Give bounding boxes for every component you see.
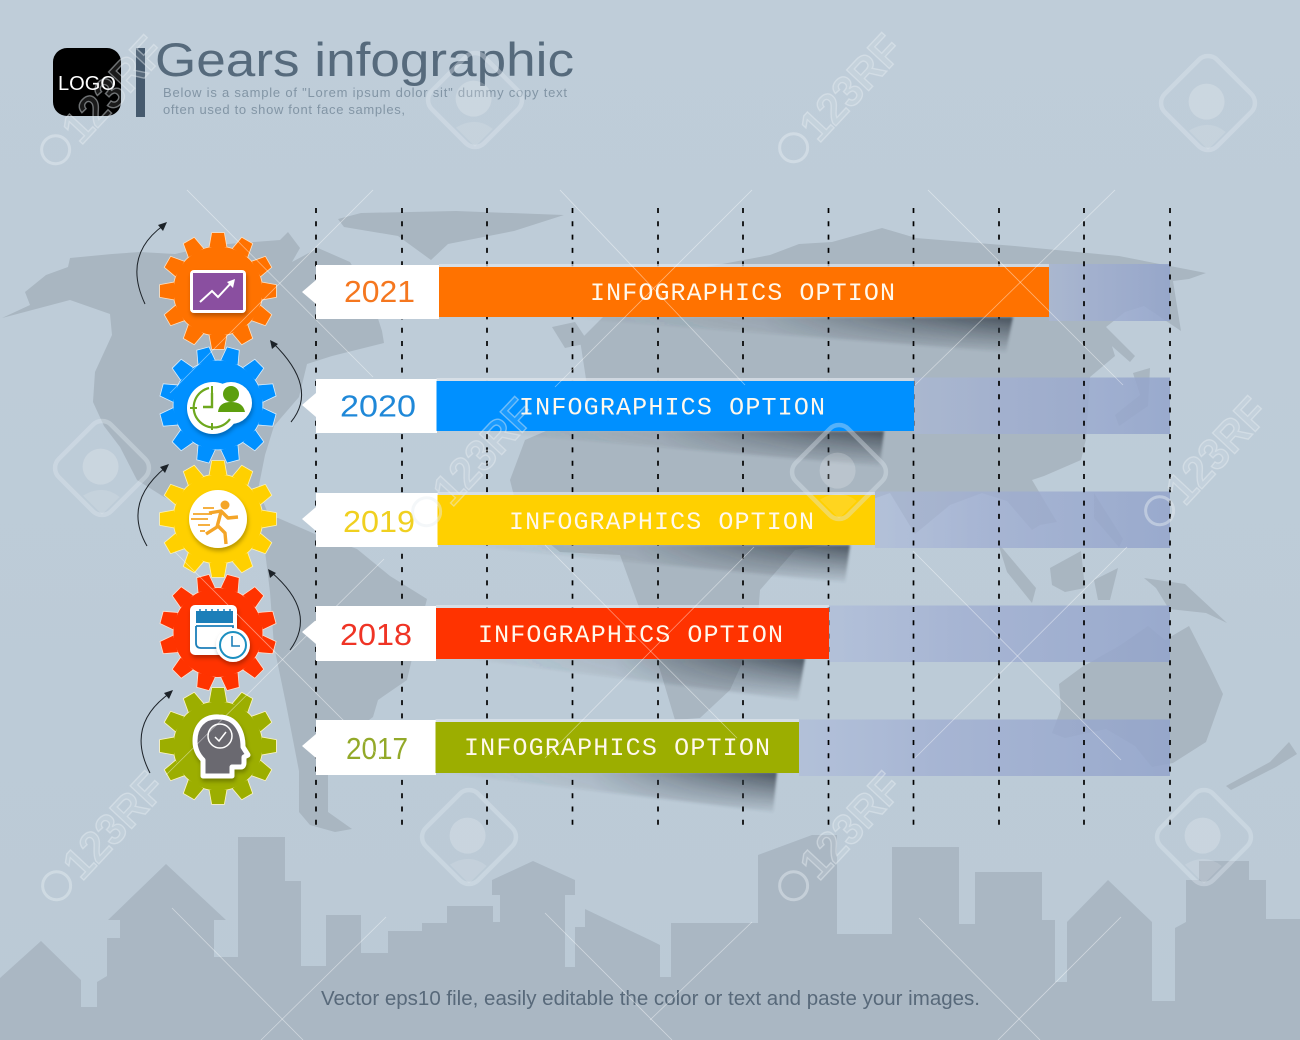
faint progress track bars xyxy=(799,264,1170,776)
watermark crossing lines xyxy=(166,190,1127,1040)
icon: trending chart xyxy=(190,270,246,313)
icon: runner xyxy=(189,490,247,548)
bar 2020 xyxy=(436,378,914,431)
bar 2018: INFOGRAPHICS OPTION xyxy=(478,621,783,650)
row 2019 xyxy=(302,492,875,547)
header logo xyxy=(53,48,121,116)
icon: calendar and clock xyxy=(190,605,250,662)
rotation arrows xyxy=(137,222,302,773)
icon: clock and person xyxy=(187,382,252,434)
world map xyxy=(2,211,1297,832)
year label 2020 xyxy=(302,379,437,433)
year label 2018: 2018 xyxy=(340,617,412,652)
watermark stamps: 123RF xyxy=(790,763,912,889)
watermark stamps: 123RF xyxy=(1156,388,1278,514)
subtitle xyxy=(163,85,567,117)
watermark eggs xyxy=(50,48,1260,889)
year label 2017: 2017 xyxy=(346,731,408,766)
bar 2017: INFOGRAPHICS OPTION xyxy=(464,734,770,763)
footer caption: Vector eps10 file, easily editable the color or text and paste your images. xyxy=(321,988,980,1010)
year label 2019: 2019 xyxy=(343,504,415,539)
year label 2018 xyxy=(302,606,436,661)
icon: head with clock xyxy=(195,717,248,776)
year label 2019 xyxy=(302,493,438,547)
year label 2021 xyxy=(302,265,439,319)
gear: 2020 blue xyxy=(147,334,289,476)
year label 2020: 2020 xyxy=(340,388,416,424)
bar shadows xyxy=(440,317,1013,812)
gear: 2021 orange xyxy=(160,233,276,349)
bar 2019: INFOGRAPHICS OPTION xyxy=(509,508,814,537)
timeline dashed grid xyxy=(316,208,1170,833)
subtitle: Below is a sample of "Lorem ipsum dolor sit" dummy copy text xyxy=(163,85,567,100)
year label 2021: 2021 xyxy=(344,274,415,309)
bar 2018 xyxy=(436,605,829,659)
watermark stamps: 123RF xyxy=(52,27,174,153)
bar 2020: INFOGRAPHICS OPTION xyxy=(519,394,825,422)
row 2018 xyxy=(302,605,829,661)
bar 2021 xyxy=(439,264,1049,317)
header bar xyxy=(136,48,145,117)
gear: 2019 yellow xyxy=(160,461,276,577)
watermark stamps: 123RF xyxy=(790,25,912,151)
bar 2021: INFOGRAPHICS OPTION xyxy=(590,279,895,308)
gear: 2017 green xyxy=(160,688,276,804)
city skyline xyxy=(0,835,1300,1040)
title: Gears infographic xyxy=(155,33,574,86)
year label 2017 xyxy=(302,720,436,775)
header logo: LOGO xyxy=(58,73,116,95)
row 2020 xyxy=(302,378,914,433)
watermark stamps: 123RF xyxy=(423,389,545,515)
watermark stamps: 123RF xyxy=(53,763,175,889)
row 2017 xyxy=(302,719,799,775)
gear: 2018 red xyxy=(147,561,289,704)
bar 2017 xyxy=(436,719,799,773)
row 2021 xyxy=(302,264,1049,319)
subtitle: often used to show font face samples, xyxy=(163,102,405,117)
bar 2019 xyxy=(438,492,875,545)
